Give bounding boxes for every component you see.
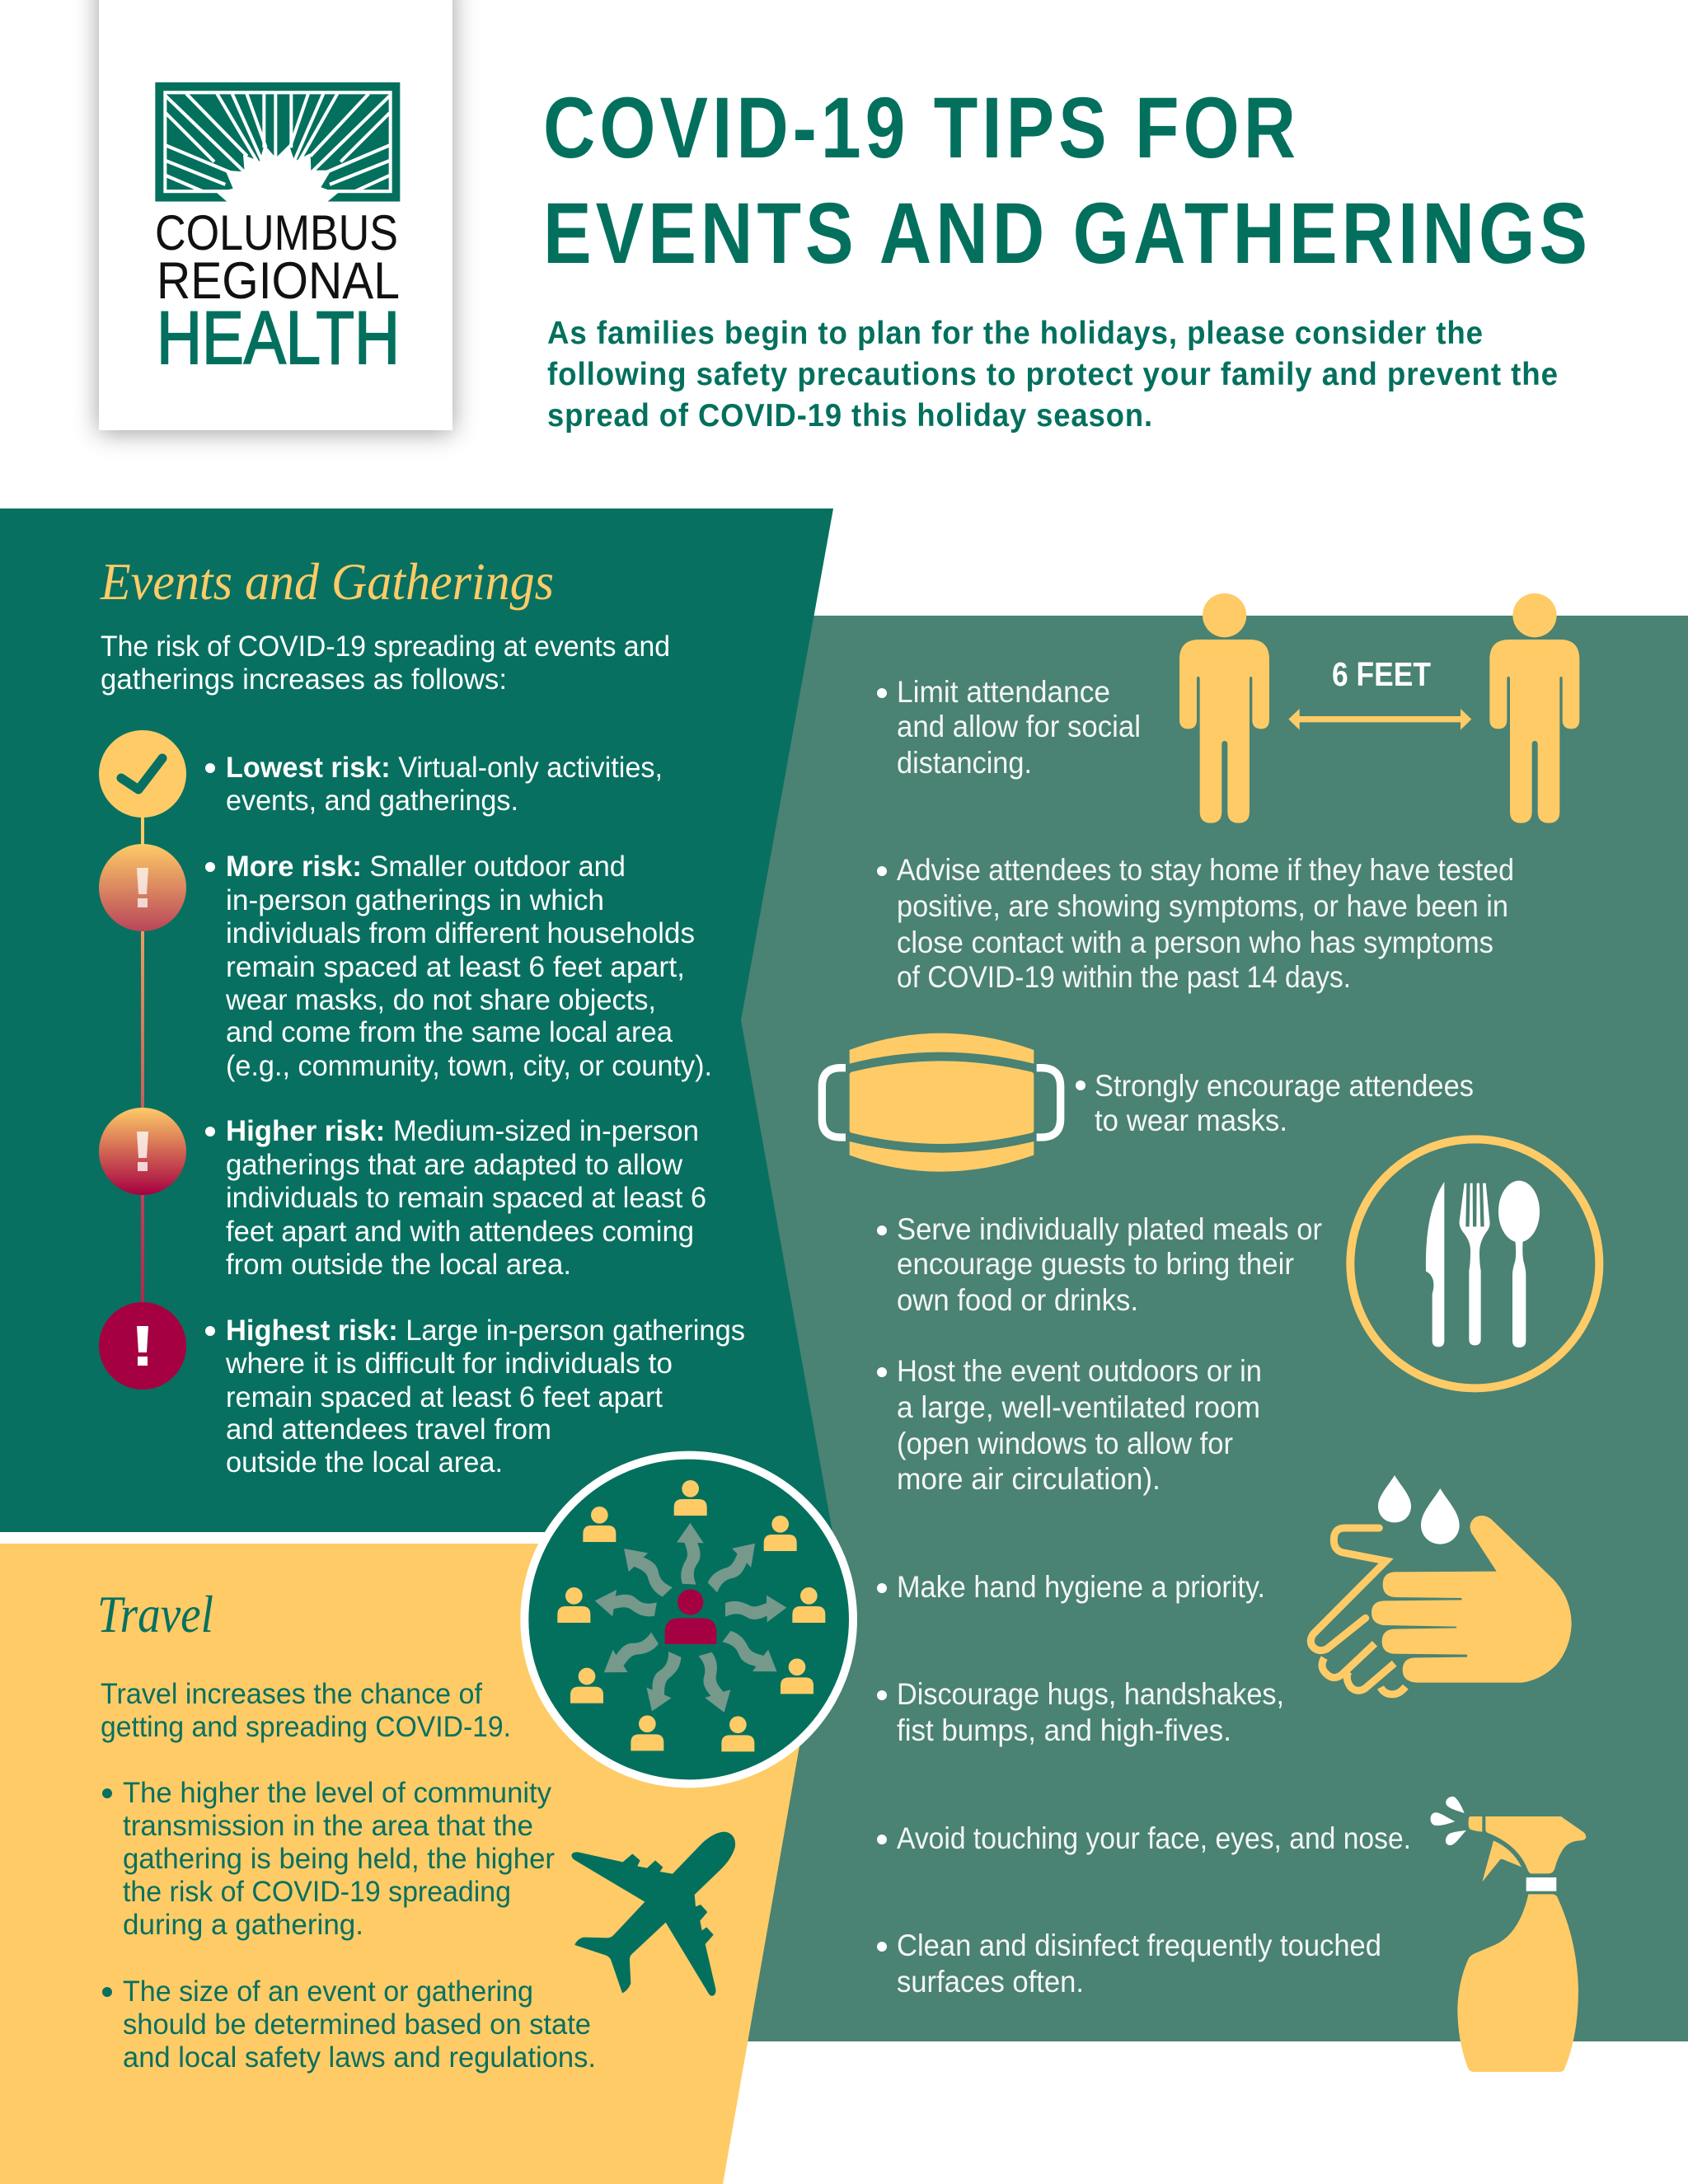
- text: clean and disinfect: [877, 1929, 1381, 1999]
- subtitle: following safety precautions to protect your family and prevent the: [547, 357, 1559, 392]
- panel: events and gatherings background: [0, 509, 833, 1532]
- panel: travel background: [0, 1544, 835, 2184]
- text: more risk: in-person gatherings in which: [226, 884, 604, 916]
- text: travel bullet event size: [102, 1975, 596, 2074]
- text: advise attendees: close contact with a person who has symptoms: [897, 926, 1493, 959]
- heading: Events and Gatherings: Events and Gatherings: [100, 552, 554, 611]
- text: advise attendees: [877, 853, 1514, 994]
- text: highest risk: where it is difficult for individuals to: [225, 1347, 673, 1380]
- heading: Travel: Travel: [97, 1585, 213, 1643]
- text: higher risk: from outside the local area.: [226, 1249, 571, 1281]
- spray droplets: [1431, 1797, 1466, 1845]
- text: limit attendance: Limit attendance: [897, 675, 1110, 709]
- text: travel intro: getting and spreading COVID-19.: [101, 1711, 511, 1743]
- text: lowest risk: [205, 752, 663, 817]
- figure left: [1179, 593, 1269, 823]
- text: more risk: individuals from different households: [226, 917, 695, 949]
- icon: airplane: [571, 1832, 735, 1996]
- text: no hugs: [877, 1677, 1284, 1747]
- text: more risk: (e.g., community, town, city, or county).: [226, 1050, 712, 1082]
- central crimson person: [665, 1589, 716, 1644]
- text: highest risk: remain spaced at least 6 feet apart: [226, 1381, 663, 1413]
- icon: knife fork spoon in circle: [1350, 1139, 1599, 1388]
- wavy arrows: [593, 1522, 786, 1717]
- text: advise attendees: Advise attendees to stay home if they have tested: [897, 853, 1514, 887]
- label: 6 FEET: 6 FEET: [1332, 655, 1431, 693]
- text: host outdoors: a large, well-ventilated room: [897, 1390, 1260, 1424]
- subtitle: [547, 316, 1559, 434]
- text: plated meals: Serve individually plated meals or: [897, 1212, 1322, 1246]
- text: advise attendees: positive, are showing symptoms, or have been in: [897, 889, 1508, 923]
- text: limit attendance: distancing.: [897, 746, 1032, 780]
- text: travel bullet event size: and local safety laws and regulations.: [123, 2041, 596, 2074]
- icon: two figures 6 feet apart: [1179, 593, 1579, 823]
- water drops: [1378, 1475, 1460, 1544]
- text: travel bullet community transmission: the risk of COVID-19 spreading: [123, 1876, 511, 1908]
- text: limit attendance: [877, 675, 1141, 780]
- text: more risk: remain spaced at least 6 feet apart,: [226, 951, 685, 983]
- text: travel intro: [101, 1678, 511, 1743]
- text: travel bullet community transmission: transmission in the area that the: [123, 1810, 533, 1842]
- logo sunburst: [155, 82, 400, 202]
- logo wordmark: REGIONAL: [157, 252, 400, 310]
- title: COVID-19 TIPS FOR: [543, 80, 1300, 176]
- icon: spray bottle: [1431, 1797, 1586, 2072]
- text: highest risk: Highest risk: Large in-person gatherings: [226, 1315, 745, 1347]
- outlined hand: [1311, 1528, 1405, 1694]
- text: plated meals: encourage guests to bring their: [897, 1247, 1294, 1281]
- bottle body and head: [1457, 1816, 1586, 2072]
- text: wear masks: [1076, 1069, 1474, 1137]
- icon: lowest risk check: [99, 730, 186, 818]
- text: clean and disinfect: surfaces often.: [897, 1965, 1084, 1999]
- text: wear masks: Strongly encourage attendees: [1095, 1069, 1474, 1103]
- solid hand: [1372, 1516, 1572, 1683]
- figure right: [1489, 593, 1579, 823]
- double arrow: [1288, 709, 1471, 730]
- title: [543, 80, 1592, 282]
- text: higher risk: [205, 1115, 706, 1281]
- text: travel bullet community transmission: during a gathering.: [123, 1909, 363, 1941]
- icon: washing hands: [1311, 1475, 1572, 1694]
- text: travel bullet community transmission: The higher the level of community: [123, 1777, 551, 1809]
- text: travel bullet event size: The size of an event or gathering: [123, 1975, 533, 2008]
- text: host outdoors: (open windows to allow for: [897, 1427, 1233, 1460]
- text: host outdoors: Host the event outdoors or in: [897, 1354, 1262, 1388]
- risk ladder connectors: [141, 812, 144, 1315]
- text: more risk: and come from the same local area: [226, 1016, 673, 1048]
- text: limit attendance: and allow for social: [897, 710, 1141, 743]
- text: more risk: More risk: Smaller outdoor and: [226, 851, 626, 883]
- text: travel bullet community transmission: [102, 1777, 555, 1941]
- logo card: [99, 0, 452, 430]
- yellow people: [557, 1480, 825, 1751]
- text: higher risk: Higher risk: Medium-sized in-person: [226, 1115, 699, 1147]
- logo wordmark: HEALTH: [157, 297, 400, 380]
- text: lowest risk: Lowest risk: Virtual-only activities,: [226, 752, 663, 784]
- text: wear masks: to wear masks.: [1095, 1104, 1287, 1137]
- text: avoid touching face: Avoid touching your face, eyes, and nose.: [897, 1821, 1411, 1855]
- text: more risk: wear masks, do not share objects,: [225, 984, 656, 1016]
- text: higher risk: individuals to remain spaced at least 6: [226, 1182, 706, 1214]
- text: clean and disinfect: Clean and disinfect frequently touched: [897, 1929, 1381, 1962]
- text: travel bullet community transmission: gathering is being held, the higher: [123, 1843, 555, 1875]
- text: no hugs: fist bumps, and high-fives.: [897, 1713, 1231, 1747]
- icon: higher risk warning: [99, 1108, 186, 1195]
- logo wordmark: [155, 205, 400, 380]
- text: highest risk: and attendees travel from: [226, 1413, 551, 1446]
- text: plated meals: own food or drinks.: [897, 1283, 1138, 1317]
- subtitle: As families begin to plan for the holidays, please consider the: [547, 316, 1484, 351]
- text: higher risk: feet apart and with attendees coming: [226, 1216, 694, 1248]
- intro text: risk of spreading: [101, 630, 670, 696]
- text: lowest risk: events, and gatherings.: [226, 785, 518, 817]
- intro text: risk of spreading: gatherings increases as follows:: [101, 663, 507, 696]
- text: hand hygiene: Make hand hygiene a priority.: [897, 1570, 1265, 1604]
- panel: light green tips background: [701, 616, 1688, 2041]
- logo wordmark: COLUMBUS: [155, 205, 398, 260]
- text: plated meals: [877, 1212, 1322, 1317]
- text: travel intro: Travel increases the chance of: [101, 1678, 482, 1710]
- text: host outdoors: [877, 1354, 1262, 1496]
- intro text: risk of spreading: The risk of COVID-19 spreading at events and: [101, 630, 670, 663]
- icon: people spreading circle: [524, 1455, 853, 1783]
- text: advise attendees: of COVID-19 within the past 14 days.: [897, 960, 1351, 994]
- text: no hugs: Discourage hugs, handshakes,: [897, 1677, 1284, 1711]
- text: higher risk: gatherings that are adapted to allow: [226, 1149, 683, 1181]
- icon: face mask: [822, 1033, 1061, 1172]
- subtitle: spread of COVID-19 this holiday season.: [547, 398, 1153, 434]
- text: more risk: [205, 851, 712, 1082]
- text: highest risk: outside the local area.: [226, 1446, 503, 1479]
- text: highest risk: [205, 1315, 745, 1479]
- icon: highest risk warning: [99, 1302, 186, 1390]
- text: host outdoors: more air circulation).: [897, 1462, 1160, 1496]
- text: travel bullet event size: should be determined based on state: [123, 2008, 591, 2041]
- icon: more risk warning: [99, 844, 186, 931]
